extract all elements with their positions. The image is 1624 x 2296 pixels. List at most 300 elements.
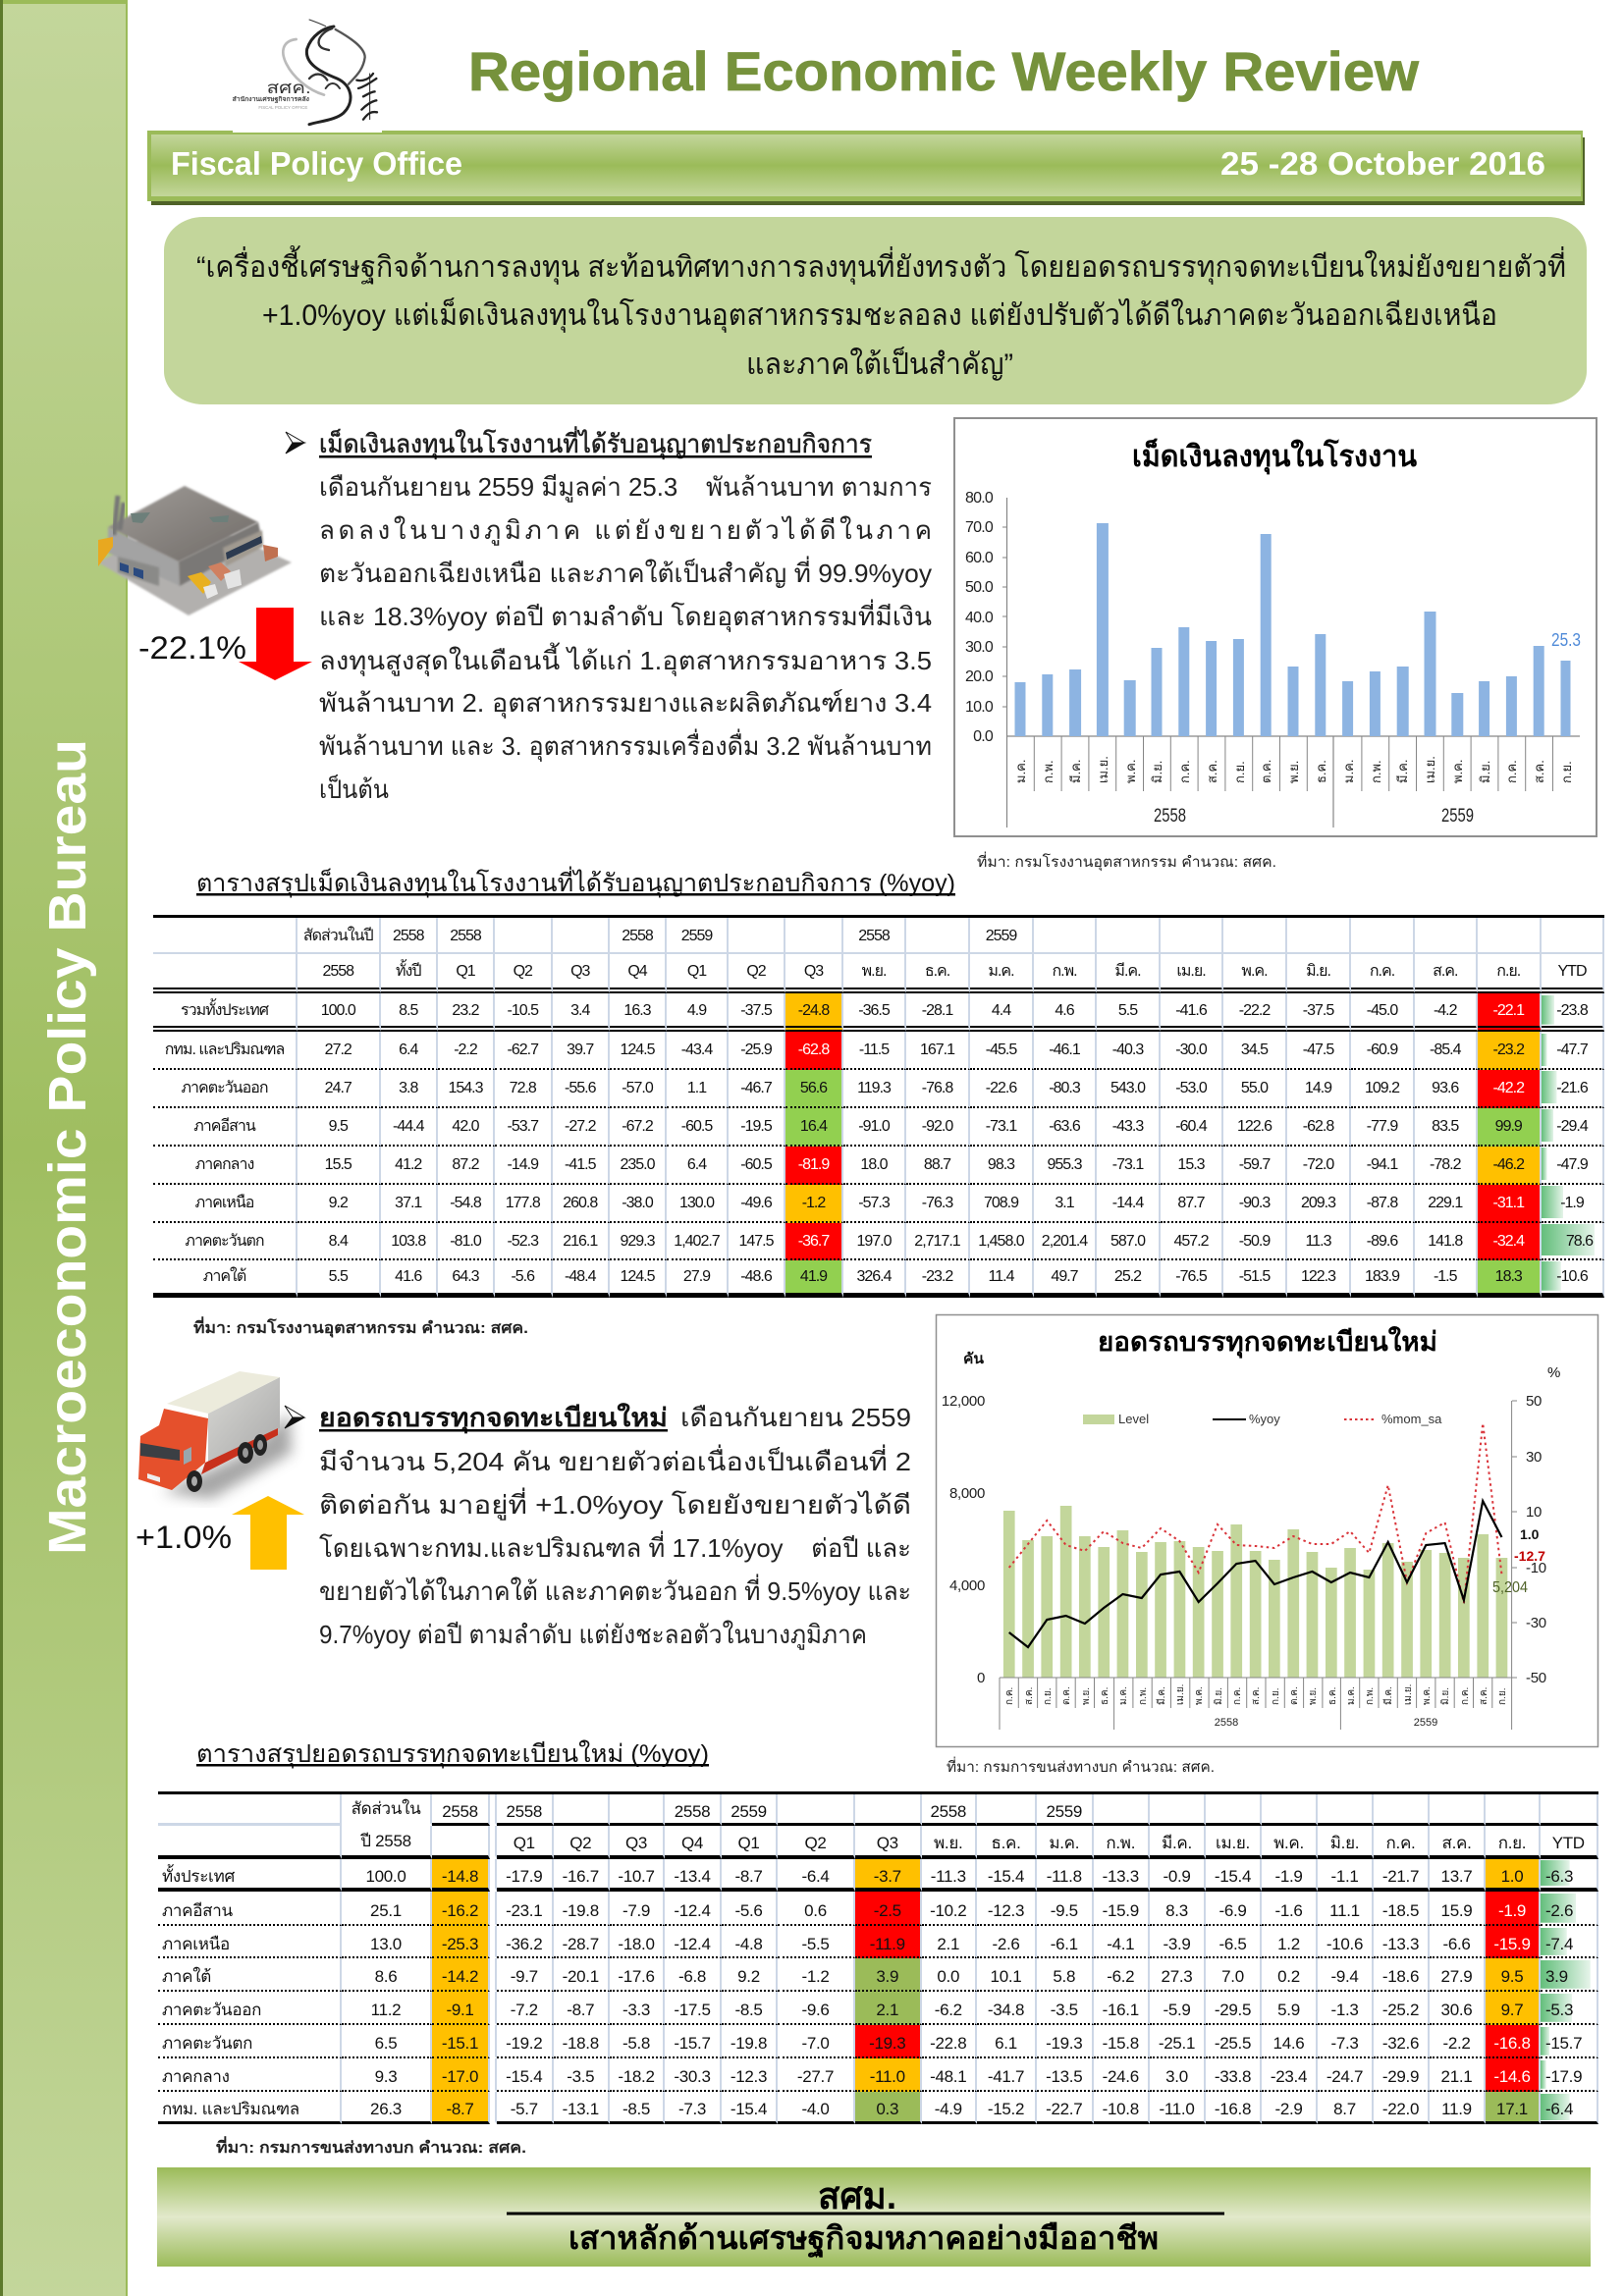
- row: Northeast: -60.4: [1175, 1118, 1207, 1135]
- header row: periods: ธ.ค.: [992, 1834, 1021, 1852]
- row: South: 7.0: [1221, 1967, 1244, 1986]
- line: %yoy: [1009, 1501, 1502, 1647]
- row: Northeast: -29.4: [1556, 1118, 1588, 1135]
- row: Bangkok and vicinity: -43.4: [681, 1041, 712, 1058]
- row: South: 11.4: [989, 1268, 1013, 1285]
- row: South: 124.5: [620, 1268, 655, 1285]
- combo chart: new truck registrations: ม.ค.: [1118, 1686, 1129, 1705]
- combo chart: new truck registrations: มิ.ย.: [1214, 1687, 1224, 1705]
- combo chart: new truck registrations: ก.ย.: [1497, 1688, 1508, 1705]
- combo chart: new truck registrations: -12.7: [1514, 1548, 1545, 1564]
- row: South: -23.2: [922, 1268, 952, 1285]
- row: Bangkok and vicinity: -62.7: [508, 1041, 538, 1058]
- header row: periods: เม.ย.: [1176, 963, 1206, 980]
- row: Bangkok and vicinity: 167.1: [920, 1041, 954, 1058]
- row: Bangkok and vicinity: 6.4: [399, 1041, 417, 1058]
- row: West: -7.0: [801, 2034, 830, 2053]
- row: West: 14.6: [1273, 2034, 1304, 2053]
- row: West: 457.2: [1173, 1233, 1209, 1249]
- row: West: -81.0: [450, 1233, 481, 1249]
- header row: periods: YTD: [1552, 1834, 1585, 1852]
- header row: periods: [158, 1826, 1598, 1859]
- header row: periods: [153, 954, 1604, 993]
- header row: years: 2558: [930, 1802, 966, 1820]
- row: East: 543.0: [1110, 1080, 1145, 1096]
- row: Northeast: ภาคอีสาน: [193, 1118, 255, 1135]
- row: North: -28.7: [563, 1934, 599, 1953]
- bar chart: factory investment: ส.ค.: [1205, 760, 1219, 783]
- row: Central: -11.0: [870, 2067, 905, 2086]
- row: North: -12.4: [674, 1934, 711, 1953]
- row: South: 122.3: [1301, 1268, 1335, 1285]
- row: Northeast: ภาคอีสาน: [162, 1900, 233, 1920]
- row: Central: -47.9: [1556, 1156, 1588, 1173]
- header row: years: 2558: [450, 927, 481, 944]
- row: West: 6.1: [995, 2034, 1017, 2053]
- row: Central: -33.8: [1215, 2067, 1251, 2086]
- row: Northeast: -2.5: [874, 1900, 901, 1920]
- row: Central: -17.0: [442, 2067, 478, 2086]
- row: Bangkok and vicinity: -11.5: [859, 1041, 889, 1058]
- header row: periods: 2558: [322, 963, 353, 980]
- row: Central: 41.2: [395, 1156, 421, 1173]
- row: West: 2,717.1: [914, 1233, 960, 1249]
- row: South: -76.5: [1175, 1268, 1207, 1285]
- row: North: -49.6: [740, 1195, 772, 1211]
- row: Northeast: 0.6: [804, 1900, 827, 1920]
- bar chart: factory investment: 0.0: [973, 728, 994, 745]
- header row: years: 2558: [442, 1802, 478, 1820]
- row: East: -76.8: [922, 1080, 952, 1096]
- row: East: 5.9: [1277, 2001, 1300, 2019]
- row: Central: 87.2: [452, 1156, 479, 1173]
- source note: table 2: ที่มา: กรมการขนส่งทางบก คำนวณ: สศค.: [216, 2136, 526, 2157]
- row: whole country: -13.4: [674, 1867, 711, 1885]
- icon: bullet arrow: [286, 432, 304, 454]
- row: South: 9.5: [1501, 1967, 1523, 1986]
- header row: periods: Q3: [804, 963, 823, 980]
- legend: Level: [1118, 1412, 1149, 1426]
- row: West: [158, 2025, 1598, 2058]
- row: South: 25.2: [1114, 1268, 1141, 1285]
- header row: years: 2559: [1046, 1802, 1082, 1820]
- row: South: 0.0: [937, 1967, 959, 1986]
- row: whole country: -22.2: [1239, 1001, 1270, 1019]
- row: North: -87.8: [1367, 1195, 1397, 1211]
- row: West: -50.9: [1239, 1233, 1270, 1249]
- row: North: -76.3: [922, 1195, 952, 1211]
- text block: factory investment: ตะวันออกเฉียงเหนือ และภาคใต้เป็นสำคัญ ที่ 99.9%yoy: [319, 556, 932, 588]
- bar chart: factory investment: มิ.ย.: [1150, 761, 1164, 783]
- header row: periods: มี.ค.: [1114, 963, 1141, 980]
- header row: years: สัดส่วนในปี: [303, 927, 373, 944]
- header row: periods: พ.ค.: [1241, 963, 1268, 980]
- row: whole country: -37.5: [1303, 1001, 1333, 1019]
- row: whole country: -11.3: [931, 1867, 966, 1885]
- label: -22.1%: -22.1%: [138, 630, 246, 666]
- row: Central: -14.9: [508, 1156, 538, 1173]
- row: East: ภาคตะวันออก: [162, 2001, 261, 2019]
- row: North: -6.1: [1051, 1934, 1078, 1953]
- row: Central: -59.7: [1239, 1156, 1270, 1173]
- row: South: -9.4: [1330, 1967, 1359, 1986]
- bar chart: factory investment: 10.0: [965, 699, 994, 716]
- bar chart: factory investment: 50.0: [965, 579, 994, 596]
- row: North: -14.4: [1112, 1195, 1143, 1211]
- source note: chart 1: ที่มา: กรมโรงงานอุตสาหกรรม คำนวณ: สศค.: [977, 851, 1276, 872]
- row: Central: ภาคกลาง: [195, 1156, 253, 1173]
- row: Bangkok and vicinity: 17.1: [1496, 2100, 1528, 2118]
- row: West: 147.5: [738, 1233, 774, 1249]
- header row: periods: พ.ค.: [1273, 1834, 1304, 1852]
- row: Central: -72.0: [1303, 1156, 1333, 1173]
- row: West: -19.2: [506, 2034, 542, 2053]
- row: South: 27.9: [683, 1268, 710, 1285]
- row: South: [158, 1958, 1598, 1992]
- row: North: -15.9: [1493, 1934, 1531, 1953]
- row: North: 260.8: [563, 1195, 597, 1211]
- row: Bangkok and vicinity: -85.4: [1430, 1041, 1460, 1058]
- row: whole country: รวมทั้งประเทศ: [181, 1001, 268, 1019]
- row: whole country: -16.7: [563, 1867, 599, 1885]
- row: Northeast: -6.9: [1218, 1900, 1247, 1920]
- row: Central: 88.7: [924, 1156, 950, 1173]
- row: whole country: -15.4: [988, 1867, 1024, 1885]
- combo chart: new truck registrations: 0: [977, 1670, 985, 1686]
- row: North: -4.8: [734, 1934, 763, 1953]
- combo chart: new truck registrations: 2559: [1414, 1717, 1437, 1729]
- combo chart: new truck registrations: ก.ค.: [1232, 1687, 1243, 1705]
- row: South: -1.5: [1434, 1268, 1457, 1285]
- row: Central: 15.3: [1177, 1156, 1205, 1173]
- row: East: ภาคตะวันออก: [181, 1080, 268, 1096]
- combo chart: new truck registrations: มิ.ย.: [1440, 1687, 1451, 1705]
- combo chart: new truck registrations: ก.ย.: [1271, 1688, 1281, 1705]
- bar chart: factory investment: 70.0: [965, 519, 994, 536]
- combo chart: new truck registrations: มี.ค.: [1382, 1686, 1394, 1705]
- data label: 25.3: 25.3: [1551, 630, 1581, 650]
- row: North: 209.3: [1301, 1195, 1335, 1211]
- icon: Fiscal Policy Office logo: สำนักงานเศรษฐกิจการคลัง: [233, 95, 309, 104]
- combo chart: new truck registrations: ธ.ค.: [1327, 1687, 1338, 1705]
- header row: years: 2558: [506, 1802, 542, 1820]
- row: whole country: 13.7: [1441, 1867, 1472, 1885]
- row: East: 1.1: [687, 1080, 706, 1096]
- row: whole country: -11.8: [1047, 1867, 1082, 1885]
- header row: periods: ก.ย.: [1498, 1834, 1526, 1852]
- row: Bangkok and vicinity: -8.7: [446, 2100, 474, 2118]
- row: East: -21.6: [1556, 1080, 1588, 1096]
- header band: 25 -28 October 2016: [1220, 145, 1545, 182]
- row: Central: -14.6: [1493, 2067, 1531, 2086]
- row: Northeast: [158, 1892, 1598, 1926]
- row: West: -22.8: [930, 2034, 966, 2053]
- header row: periods: เม.ย.: [1216, 1834, 1250, 1852]
- bar chart: factory investment: 2559: [1441, 806, 1474, 827]
- bar chart: factory investment: ก.ย.: [1559, 761, 1574, 783]
- row: West: 11.3: [1306, 1233, 1330, 1249]
- row: South: 49.7: [1051, 1268, 1078, 1285]
- row: South: -17.6: [618, 1967, 655, 1986]
- icon: factory: [98, 486, 292, 615]
- row: Bangkok and vicinity: กทม. และปริมณฑล: [165, 1041, 284, 1058]
- row: North: -6.6: [1442, 1934, 1471, 1953]
- combo chart: new truck registrations: 4,000: [949, 1577, 985, 1594]
- combo chart: new truck registrations: 2558: [1215, 1717, 1238, 1729]
- header row: periods: ส.ค.: [1433, 963, 1457, 980]
- row: whole country: -36.5: [858, 1001, 890, 1019]
- row: North: 9.2: [329, 1195, 348, 1211]
- header row: years: สัดส่วนใน: [352, 1799, 420, 1818]
- row: Central: -73.1: [1112, 1156, 1143, 1173]
- row: whole country: -10.5: [508, 1001, 538, 1019]
- row: Central: ภาคกลาง: [162, 2067, 230, 2086]
- row: South: 183.9: [1365, 1268, 1399, 1285]
- row: Bangkok and vicinity: -15.4: [731, 2100, 767, 2118]
- row: East: 9.7: [1501, 2001, 1523, 2019]
- row: Bangkok and vicinity: -15.2: [988, 2100, 1024, 2118]
- row: North: -31.1: [1493, 1195, 1524, 1211]
- row: West: -7.3: [1330, 2034, 1359, 2053]
- header row: years: 2559: [681, 927, 712, 944]
- row: East: -8.5: [734, 2001, 763, 2019]
- row: whole country: -17.9: [506, 1867, 542, 1885]
- row: Bangkok and vicinity: 124.5: [620, 1041, 655, 1058]
- combo chart: new truck registrations: มี.ค.: [1156, 1686, 1167, 1705]
- row: Central: 21.1: [1441, 2067, 1472, 2086]
- row: North: -90.3: [1239, 1195, 1270, 1211]
- row: whole country: [158, 1859, 1598, 1892]
- row: whole country: -28.1: [922, 1001, 952, 1019]
- row: whole country: -15.4: [1215, 1867, 1251, 1885]
- row: Bangkok and vicinity: -4.9: [935, 2100, 962, 2118]
- row: East: -34.8: [988, 2001, 1024, 2019]
- heading: new truck registrations: ยอดรถบรรทุกจดทะเบียนใหม่: [319, 1403, 668, 1434]
- row: whole country: -23.8: [1556, 1001, 1588, 1019]
- bar chart: factory investment: มี.ค.: [1395, 760, 1410, 783]
- row: North: -6.5: [1218, 1934, 1247, 1953]
- footer band: [157, 2167, 1591, 2267]
- table heading: truck registrations: ตารางสรุปยอดรถบรรทุกจดทะเบียนใหม่ (%yoy): [196, 1739, 709, 1769]
- combo chart: new truck registrations: ก.ค.: [1004, 1687, 1015, 1705]
- row: East: 24.7: [325, 1080, 352, 1096]
- row: East: 30.6: [1441, 2001, 1472, 2019]
- icon: bullet arrow: [285, 1406, 304, 1428]
- row: Bangkok and vicinity: -13.1: [563, 2100, 599, 2118]
- combo chart: new truck registrations: ก.ย.: [1043, 1688, 1054, 1705]
- text block: factory investment: และ 18.3%yoy ต่อปี ตามลำดับ โดยอุตสาหกรรมที่มีเงิน: [319, 599, 932, 632]
- row: Central: -23.4: [1271, 2067, 1307, 2086]
- row: South: 27.9: [1441, 1967, 1472, 1986]
- row: Northeast: -10.2: [930, 1900, 966, 1920]
- row: South: -18.6: [1382, 1967, 1419, 1986]
- row: North: -54.8: [450, 1195, 481, 1211]
- row: Bangkok and vicinity: [153, 1032, 1604, 1070]
- combo chart: new truck registrations: 5,204: [1492, 1579, 1528, 1596]
- row: East: 154.3: [448, 1080, 483, 1096]
- row: South: 8.6: [375, 1967, 397, 1986]
- row: West: -15.1: [442, 2034, 478, 2053]
- combo chart: new truck registrations: ต.ค.: [1289, 1686, 1300, 1705]
- arrow: red down: [239, 608, 312, 680]
- text block: factory investment: เป็นต้น: [319, 774, 389, 804]
- row: North: 37.1: [395, 1195, 421, 1211]
- header row: periods: Q3: [570, 963, 589, 980]
- header row: periods: Q4: [681, 1834, 703, 1852]
- row: South: -51.5: [1239, 1268, 1270, 1285]
- row: Bangkok and vicinity: -5.7: [511, 2100, 538, 2118]
- row: Central: -81.9: [798, 1156, 829, 1173]
- row: Northeast: -44.4: [393, 1118, 423, 1135]
- row: Central: -24.6: [1103, 2067, 1139, 2086]
- bar chart: factory investment: มี.ค.: [1068, 760, 1083, 783]
- row: whole country: -14.8: [442, 1867, 478, 1885]
- row: whole country: 1.0: [1501, 1867, 1523, 1885]
- row: Northeast: -62.8: [1303, 1118, 1333, 1135]
- row: East: -8.7: [567, 2001, 594, 2019]
- row: Northeast: -92.0: [922, 1118, 952, 1135]
- row: Northeast: -67.2: [622, 1118, 653, 1135]
- header row: years: 2559: [986, 927, 1016, 944]
- row: West: 216.1: [563, 1233, 597, 1249]
- row: Central: 235.0: [620, 1156, 655, 1173]
- header row: periods: พ.ย.: [862, 963, 886, 980]
- table heading: factory investment: ตารางสรุปเม็ดเงินลงทุนในโรงงานที่ได้รับอนุญาตประกอบกิจการ (%yoy): [196, 866, 955, 898]
- row: West: -19.3: [1046, 2034, 1082, 2053]
- combo chart: new truck registrations: ธ.ค.: [1100, 1687, 1110, 1705]
- row: South: -14.2: [442, 1967, 478, 1986]
- header row: periods: ก.พ.: [1106, 1834, 1135, 1852]
- row: South: 0.2: [1277, 1967, 1300, 1986]
- row: West: -32.4: [1493, 1233, 1524, 1249]
- header row: periods: มี.ค.: [1162, 1834, 1192, 1852]
- row: Northeast: -60.5: [681, 1118, 712, 1135]
- row: West: -89.6: [1367, 1233, 1397, 1249]
- row: South: -9.7: [511, 1967, 538, 1986]
- row: West: -16.8: [1493, 2034, 1531, 2053]
- header row: periods: Q1: [687, 963, 706, 980]
- row: whole country: 8.5: [399, 1001, 417, 1019]
- row: Central: -41.7: [988, 2067, 1024, 2086]
- row: West: -19.3: [869, 2034, 905, 2053]
- header row: periods: ส.ค.: [1441, 1834, 1471, 1852]
- row: Central: 18.0: [860, 1156, 888, 1173]
- row: East: -7.2: [511, 2001, 538, 2019]
- combo chart: new truck registrations: พ.ค.: [1422, 1686, 1433, 1705]
- table: truck registrations %yoy: [158, 1791, 1598, 2124]
- row: whole country: -21.7: [1382, 1867, 1419, 1885]
- row: Central: 15.5: [325, 1156, 352, 1173]
- source note: table 1: ที่มา: กรมโรงงานอุตสาหกรรม คำนวณ: สศค.: [193, 1316, 528, 1338]
- combo chart: new truck registrations: พ.ค.: [1194, 1686, 1205, 1705]
- bar chart: factory investment: 40.0: [965, 610, 994, 626]
- row: Bangkok and vicinity: 34.5: [1241, 1041, 1268, 1058]
- row: East: 109.2: [1365, 1080, 1399, 1096]
- row: Northeast: 11.1: [1329, 1900, 1360, 1920]
- row: Bangkok and vicinity: -47.7: [1556, 1041, 1588, 1058]
- row: East: -25.2: [1382, 2001, 1419, 2019]
- row: West: -25.5: [1215, 2034, 1251, 2053]
- row: North: -7.4: [1545, 1934, 1573, 1953]
- combo chart: new truck registrations: ส.ค.: [1024, 1687, 1035, 1705]
- combo chart: new truck registrations: พ.ย.: [1081, 1687, 1092, 1705]
- header row: years: 2558: [675, 1802, 710, 1820]
- row: North: 1.2: [1277, 1934, 1300, 1953]
- row: West: -52.3: [508, 1233, 538, 1249]
- header row: periods: มิ.ย.: [1330, 1834, 1359, 1852]
- row: North: -38.0: [622, 1195, 653, 1211]
- row: whole country: -3.7: [874, 1867, 901, 1885]
- row: East: -3.3: [623, 2001, 650, 2019]
- bar chart: factory investment: 80.0: [965, 490, 994, 507]
- row: West: -32.6: [1382, 2034, 1419, 2053]
- row: Bangkok and vicinity: [158, 2092, 1598, 2124]
- header row: periods: Q2: [514, 963, 532, 980]
- row: whole country: -4.2: [1434, 1001, 1457, 1019]
- row: East: -57.0: [622, 1080, 653, 1096]
- row: whole country: -37.5: [740, 1001, 772, 1019]
- row: West: ภาคตะวันตก: [185, 1233, 264, 1249]
- row: East: -16.1: [1103, 2001, 1139, 2019]
- row: Northeast: -91.0: [858, 1118, 890, 1135]
- text block: new truck registrations: [285, 1403, 911, 1650]
- row: East: -1.3: [1330, 2001, 1359, 2019]
- row: whole country: 23.2: [452, 1001, 479, 1019]
- row: North: -3.9: [1163, 1934, 1191, 1953]
- bar chart: factory investment: 2558: [1154, 806, 1186, 827]
- row: Northeast: -16.2: [442, 1900, 478, 1920]
- row: Central: 9.3: [375, 2067, 397, 2086]
- row: Bangkok and vicinity: -2.9: [1274, 2100, 1303, 2118]
- row: East: 93.6: [1432, 1080, 1458, 1096]
- header row: years: 2558: [858, 927, 890, 944]
- row: North: -11.9: [870, 1934, 905, 1953]
- combo chart: new truck registrations: 50: [1526, 1393, 1542, 1410]
- row: West: 6.5: [375, 2034, 397, 2053]
- row: East: 3.8: [399, 1080, 417, 1096]
- row: Central: -94.1: [1367, 1156, 1397, 1173]
- row: Bangkok and vicinity: -8.5: [623, 2100, 650, 2118]
- row: whole country: 4.4: [992, 1001, 1010, 1019]
- row: Northeast: -18.5: [1382, 1900, 1419, 1920]
- row: North: -10.6: [1326, 1934, 1363, 1953]
- header row: periods: พ.ย.: [934, 1834, 962, 1852]
- combo chart: new truck registrations: ก.ค.: [1460, 1687, 1471, 1705]
- header row: periods: Q2: [746, 963, 766, 980]
- row: East: 56.6: [800, 1080, 827, 1096]
- row: Bangkok and vicinity: -30.0: [1175, 1041, 1207, 1058]
- text block: factory investment: พันล้านบาท และ 3. อุตสาหกรรมเครื่องดื่ม 3.2 พันล้านบาท: [319, 728, 932, 762]
- text block: factory investment: เดือนกันยายน 2559 มีมูลค่า 25.3 พันล้านบาท ตามการ: [319, 472, 932, 503]
- row: South: 3.9: [1545, 1967, 1568, 1986]
- header row: periods: Q3: [877, 1834, 898, 1852]
- row: North: 229.1: [1428, 1195, 1462, 1211]
- row: East: 14.9: [1305, 1080, 1331, 1096]
- table: factory investment %yoy: [153, 915, 1604, 1298]
- icon: Fiscal Policy Office logo: FISCAL POLICY OFFICE: [258, 105, 307, 110]
- row: whole country: 100.0: [365, 1867, 406, 1885]
- combo chart: new truck registrations: ต.ค.: [1061, 1686, 1072, 1705]
- row: Northeast: -9.5: [1051, 1900, 1078, 1920]
- row: Central: -48.1: [930, 2067, 966, 2086]
- row: whole country: -13.3: [1103, 1867, 1139, 1885]
- row: East: 2.1: [876, 2001, 898, 2019]
- row: Northeast: -2.6: [1545, 1900, 1573, 1920]
- combo chart: new truck registrations: เม.ย.: [1175, 1684, 1186, 1705]
- row: Bangkok and vicinity: -6.4: [1545, 2100, 1573, 2118]
- row: North: [158, 1926, 1598, 1958]
- header row: periods: Q1: [737, 1834, 760, 1852]
